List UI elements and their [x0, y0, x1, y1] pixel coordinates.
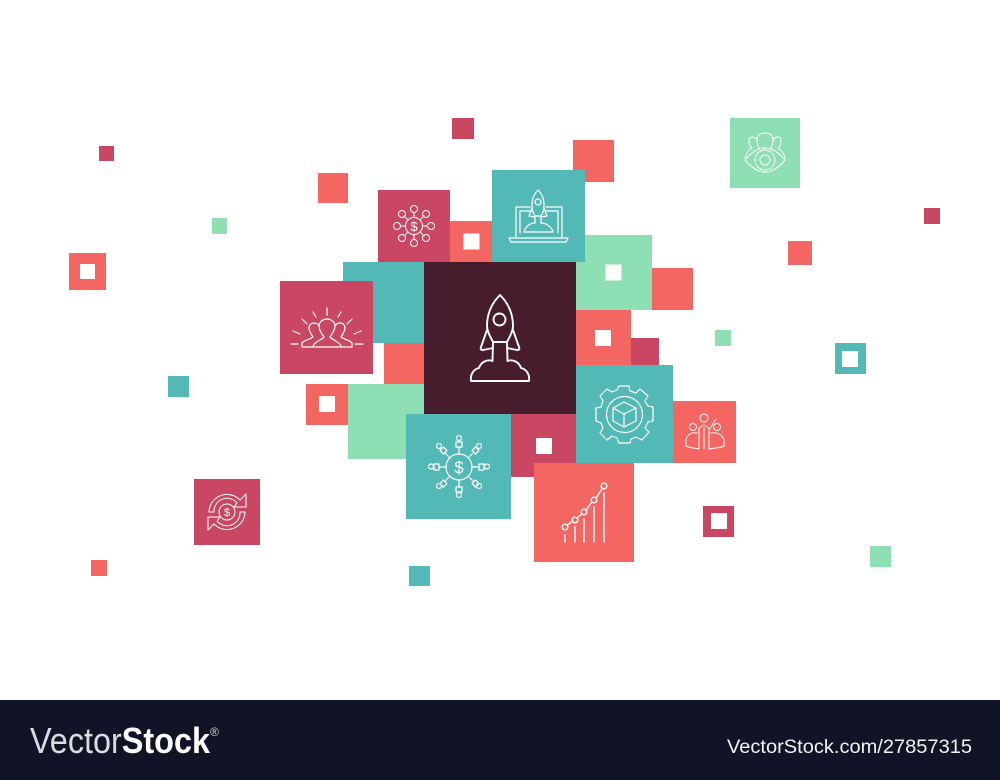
icon: eye with people	[745, 133, 785, 172]
icon: gear with cube	[596, 386, 653, 443]
panel: central rocket	[424, 262, 576, 414]
panel: investment network	[406, 414, 511, 519]
logo wordmark: VectorStock	[30, 720, 211, 761]
panel: laptop launch	[492, 170, 585, 262]
scattered decorative squares	[69, 118, 940, 586]
icon: dollar hub: $	[410, 219, 418, 234]
footer bar	[0, 700, 1000, 780]
icon: rocket from laptop	[509, 190, 568, 242]
registered mark: ®	[210, 725, 219, 739]
panel: gear product	[576, 365, 673, 463]
panel: team leader	[673, 401, 736, 463]
icon: rising bars and line	[562, 483, 607, 542]
panel: coin network	[378, 190, 450, 262]
panel: eye on people	[730, 118, 800, 188]
icon: rocket launch	[471, 295, 529, 381]
panel: team idea	[280, 281, 373, 374]
panel: cash flow	[194, 479, 260, 545]
image id: VectorStock.com/27857315	[727, 737, 972, 758]
icon: dollar cycle arrows: $	[224, 507, 230, 519]
panel: growth chart	[534, 463, 634, 562]
icon: people with rays	[291, 308, 363, 347]
icon: leader with team	[686, 414, 724, 449]
cluster background tiles	[306, 221, 693, 477]
icon: dollar with nodes: $	[454, 458, 464, 477]
